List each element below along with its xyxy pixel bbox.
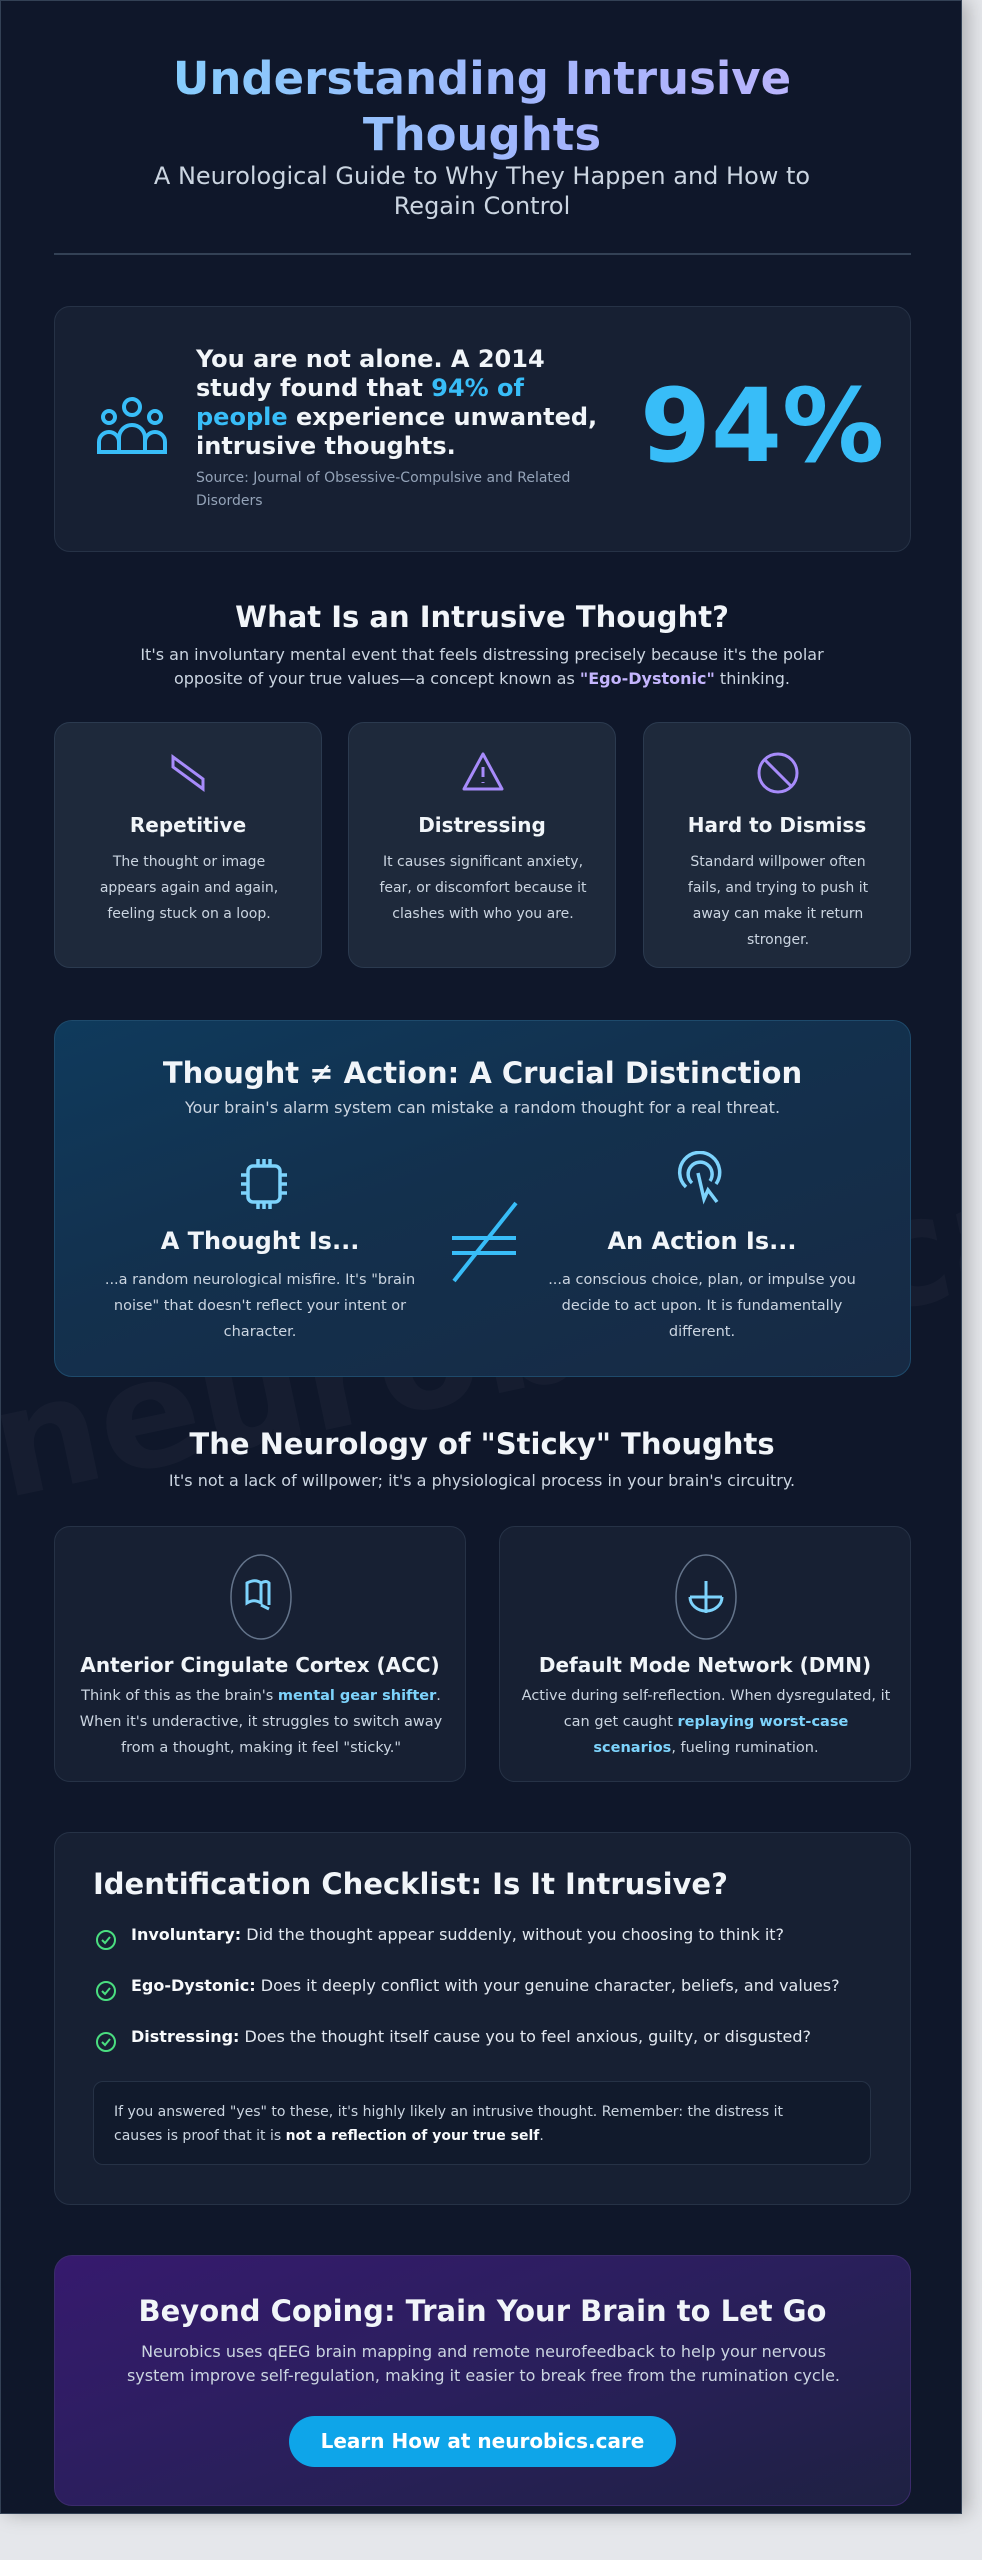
title: [61, 51, 903, 163]
icon: not equal: [452, 1202, 518, 1282]
icon: warning: [462, 752, 504, 790]
panel: thought vs action: Thought ≠ Action: A Crucial Distinction: [163, 1056, 802, 1090]
card: hard to dismiss: Hard to Dismiss: [688, 813, 866, 837]
panel: thought vs action: An Action Is...: [607, 1227, 796, 1255]
neurology subtext: It's not a lack of willpower; it's a physiological process in your brain's circuitry.: [169, 1471, 795, 1490]
subtitle: A Neurological Guide to Why They Happen and How to Regain Control: [154, 162, 810, 220]
button: Learn How at neurobics.care: [321, 2429, 644, 2453]
card: DMN: [499, 1526, 911, 1782]
icon: people: [97, 397, 167, 454]
card: repetitive: [54, 722, 322, 968]
icon: ban: [758, 752, 798, 794]
note box: If you answered "yes" to these, it's highly likely an intrusive thought. Remember: the distress it causes is proof that it is not a reflection of your true self.: [114, 2104, 783, 2144]
icon: click: [678, 1151, 722, 1204]
card: repetitive: The thought or image appears again and again, feeling stuck on a loop.: [100, 854, 278, 922]
panel: CTA: Beyond Coping: Train Your Brain to Let Go: [139, 2294, 826, 2328]
heading: what is: What Is an Intrusive Thought?: [235, 600, 729, 634]
source: Source: Journal of Obsessive-Compulsive and Related Disorders: [196, 470, 570, 509]
checklist items: Distressing: Does the thought itself cause you to feel anxious, guilty, or disgusted?: [131, 2027, 811, 2046]
note box: [93, 2081, 871, 2165]
card: hard to dismiss: [643, 722, 911, 968]
card: ACC: Think of this as the brain's mental gear shifter. When it's underactive, it struggles to switch away from a thought, making it feel "sticky.": [80, 1688, 442, 1756]
card: distressing: [348, 722, 616, 968]
card: ACC: Anterior Cingulate Cortex (ACC): [80, 1653, 440, 1677]
card: repetitive: Repetitive: [130, 813, 246, 837]
card: distressing: It causes significant anxiety, fear, or discomfort because it clashes with who you are.: [379, 854, 587, 922]
card: distressing: Distressing: [418, 813, 546, 837]
button: [289, 2416, 676, 2467]
card: hard to dismiss: Standard willpower often fails, and trying to push it away can make it return stronger.: [688, 854, 868, 948]
panel: checklist: Identification Checklist: Is It Intrusive?: [93, 1867, 728, 1901]
panel: thought vs action: [54, 1020, 911, 1377]
checklist items: Ego-Dystonic: Does it deeply conflict with your genuine character, beliefs, and values?: [131, 1976, 840, 1995]
panel: thought vs action: Your brain's alarm system can mistake a random thought for a real threat.: [185, 1098, 780, 1117]
icon: acc: [230, 1554, 292, 1640]
panel: thought vs action: A Thought Is...: [161, 1227, 359, 1255]
panel: CTA: [54, 2255, 911, 2506]
card: ACC: [54, 1526, 466, 1782]
panel: thought vs action: ...a conscious choice, plan, or impulse you decide to act upon. It is fundamentally different.: [548, 1272, 856, 1340]
title: Understanding Intrusive: [173, 52, 791, 105]
panel: checklist: [54, 1832, 911, 2205]
heading: neurology: The Neurology of "Sticky" Thoughts: [189, 1427, 775, 1461]
intro text: It's an involuntary mental event that feels distressing precisely because it's the polar opposite of your true values—a concept known as "Ego-Dystonic" thinking.: [140, 645, 824, 688]
panel: thought vs action: ...a random neurological misfire. It's "brain noise" that doesn't reflect your intent or character.: [105, 1272, 415, 1340]
panel: stat card: [54, 306, 911, 552]
icon: dmn: [675, 1554, 737, 1640]
big number: 94%: [640, 367, 884, 486]
checklist items: [96, 1925, 840, 2052]
title: Thoughts: [363, 108, 601, 161]
icon: chip: [241, 1159, 287, 1209]
card: DMN: Default Mode Network (DMN): [539, 1653, 871, 1677]
icon: repeat: [172, 754, 204, 792]
card: DMN: Active during self-reflection. When dysregulated, it can get caught replaying worst-case scenarios, fueling rumination.: [522, 1688, 890, 1756]
panel: CTA: Neurobics uses qEEG brain mapping and remote neurofeedback to help your nervous system improve self-regulation, making it easier to break free from the rumination cycle.: [127, 2342, 840, 2385]
checklist items: Involuntary: Did the thought appear suddenly, without you choosing to think it?: [131, 1925, 784, 1944]
stat text: You are not alone. A 2014 study found that 94% of people experience unwanted, intrusive thoughts.: [196, 345, 597, 460]
